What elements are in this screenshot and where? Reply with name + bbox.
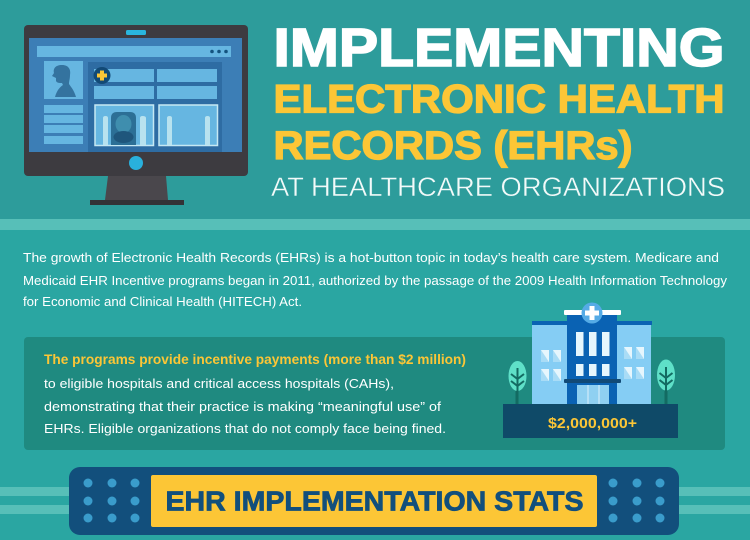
- panel text: EHRs. Eligible organizations that do not comply face being fined.: [44, 421, 446, 436]
- title line: implementing: IMPLEMENTING: [274, 18, 724, 78]
- intro text: The growth of Electronic Health Records (EHRs) is a hot-button topic in today’s health care system. Medicare and: [23, 251, 719, 265]
- decorative side stripes: [0, 487, 750, 514]
- section banner: EHR implementation stats: [69, 467, 679, 535]
- panel text: to eligible hospitals and critical access hospitals (CAHs),: [44, 376, 394, 391]
- banner heading: EHR IMPLEMENTATION STATS: [166, 486, 584, 516]
- icon: computer monitor showing patient record: [24, 25, 248, 205]
- panel: incentive payments: [24, 337, 725, 450]
- intro text: [23, 251, 728, 309]
- title line: electronic health: ELECTRONIC HEALTH: [274, 78, 724, 122]
- intro text: Medicaid EHR Incentive programs began in 2011, authorized by the passage of the 2009 Health Information Technology: [23, 274, 728, 288]
- building base with amount: $2,000,000+: [548, 415, 637, 432]
- icon: hospital with trees: [503, 302, 678, 438]
- title line: at healthcare organizations: AT HEALTHCARE ORGANIZATIONS: [271, 172, 725, 202]
- title line: records: RECORDS (EHRs): [274, 124, 632, 168]
- icon: right tree: [657, 360, 675, 405]
- building base with amount: [503, 404, 678, 438]
- icon: left tree: [508, 361, 526, 405]
- intro text: for Economic and Clinical Health (HITECH) Act.: [23, 295, 302, 309]
- title: [271, 18, 725, 202]
- panel text: [44, 376, 446, 436]
- panel text: demonstrating that their practice is making “meaningful use” of: [44, 399, 441, 414]
- panel heading: The programs provide incentive payments (more than $2 million): [44, 352, 466, 367]
